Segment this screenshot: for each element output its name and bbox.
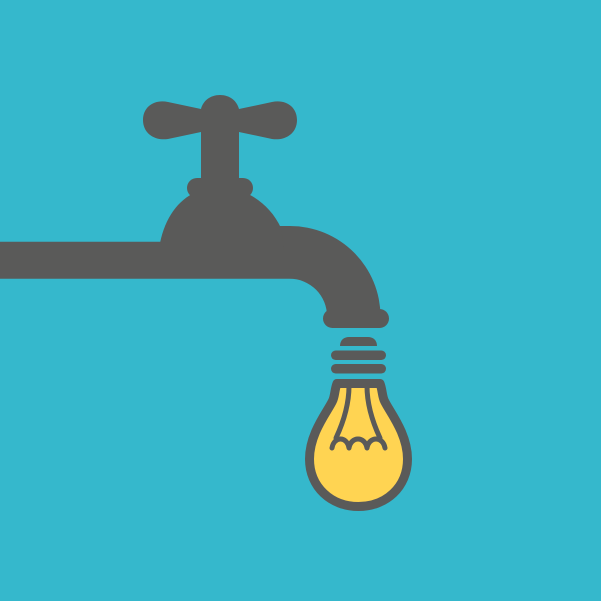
screw band upper [331,350,386,360]
faucet dome [160,192,284,250]
bulb glass [310,384,408,506]
faucet stem [201,110,239,190]
filament [332,386,385,448]
faucet collar [187,178,253,198]
faucet handle [143,95,297,139]
spout nozzle [323,309,389,328]
icon: light bulb [310,337,408,506]
icon: faucet [0,95,389,328]
bulb cap [340,337,377,346]
screw band lower [331,364,386,374]
faucet pipe and spout [0,226,380,316]
